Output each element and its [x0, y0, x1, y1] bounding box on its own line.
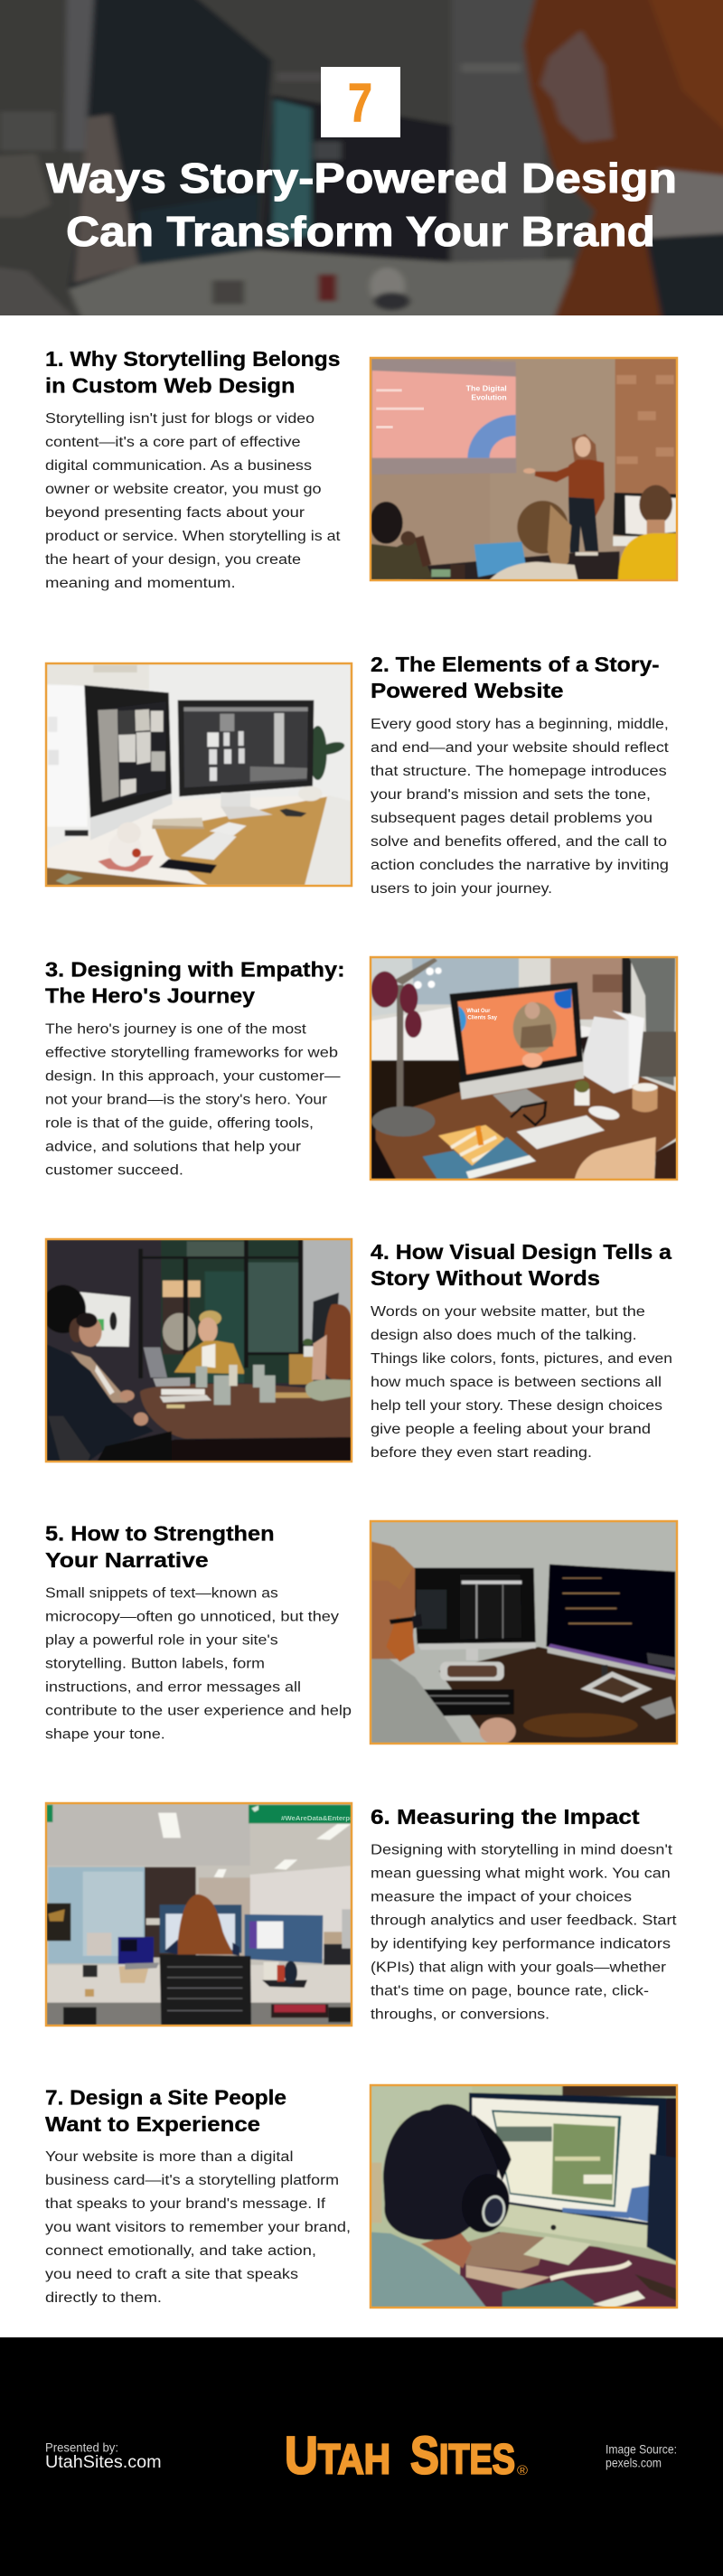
- heading 1: [45, 347, 340, 398]
- photo: developer at two monitors: [370, 1520, 678, 1744]
- heading 4: Story Without Words: [371, 1266, 600, 1290]
- section 3: [45, 956, 678, 1180]
- body text 4: Words on your website matter, but the: [371, 1304, 645, 1320]
- body text 6: mean guessing what might work. You can: [371, 1866, 671, 1882]
- body text 1: Storytelling isn't just for blogs or video: [45, 411, 315, 427]
- body text 2: users to join your journey.: [371, 881, 552, 897]
- section 4: [41, 1238, 672, 1462]
- photo: open office with woman at monitors: [45, 1802, 352, 2026]
- body text 7: [45, 2149, 351, 2306]
- body text 1: beyond presenting facts about your: [45, 505, 305, 521]
- heading 2: Powered Website: [371, 679, 564, 702]
- body text 5: contribute to the user experience and help: [45, 1703, 352, 1719]
- presented by: UtahSites.com: [45, 2453, 162, 2472]
- body text 6: measure the impact of your choices: [371, 1889, 632, 1905]
- body text 5: storytelling. Button labels, form: [45, 1656, 265, 1672]
- image source: Image Source:: [606, 2442, 677, 2457]
- body text 3: not your brand—is the story's hero. Your: [45, 1092, 327, 1108]
- body text 4: before they even start reading.: [371, 1445, 592, 1461]
- heading 2: [371, 653, 660, 702]
- header banner: [0, 0, 723, 332]
- slide text: [466, 384, 507, 401]
- title: Can Transform Your Brand: [66, 208, 655, 255]
- section 5: [45, 1520, 678, 1744]
- photo: presenter at projector screen: [370, 357, 678, 581]
- body text 2: your brand's mission and sets the tone,: [371, 787, 651, 803]
- screen text: What Our: [466, 1008, 491, 1014]
- heading 4: [371, 1240, 672, 1290]
- heading 1: 1. Why Storytelling Belongs: [45, 347, 340, 371]
- logo: Utah Sites: SITES: [410, 2426, 515, 2486]
- heading 2: 2. The Elements of a Story-: [371, 653, 660, 676]
- heading 6: 6. Measuring the Impact: [371, 1805, 640, 1829]
- heading 3: 3. Designing with Empathy:: [45, 958, 345, 982]
- heading 5: Your Narrative: [45, 1548, 209, 1572]
- banner text: #WeAreData&Enterpr: [281, 1814, 352, 1822]
- heading 5: 5. How to Strengthen: [45, 1522, 275, 1546]
- body text 1: content—it's a core part of effective: [45, 435, 301, 450]
- number badge: 7: [348, 72, 372, 133]
- title: [46, 155, 677, 255]
- screen text: Clients Say: [467, 1014, 497, 1020]
- body text 1: meaning and momentum.: [45, 576, 236, 591]
- body text 6: by identifying key performance indicators: [371, 1936, 671, 1952]
- body text 6: Designing with storytelling in mind doesn't: [371, 1842, 673, 1858]
- body text 7: connect emotionally, and take action,: [45, 2243, 316, 2259]
- body text 2: action concludes the narrative by inviting: [371, 858, 669, 873]
- body text 5: play a powerful role in your site's: [45, 1632, 278, 1649]
- body text 3: design. In this approach, your customer—: [45, 1068, 341, 1085]
- number badge: [321, 67, 400, 137]
- heading 5: [45, 1522, 275, 1572]
- section 7: [45, 2084, 678, 2308]
- photo: dual monitors on wooden desk: [45, 663, 352, 887]
- presented by: [45, 2440, 162, 2472]
- body text 3: [45, 1021, 341, 1179]
- body text 5: shape your tone.: [45, 1726, 165, 1743]
- body text 1: digital communication. As a business: [45, 458, 312, 474]
- screen text: [466, 1008, 497, 1020]
- heading 3: [45, 958, 345, 1007]
- image source: [606, 2442, 677, 2469]
- body text 2: and end—and your website should reflect: [371, 740, 670, 756]
- body text 7: business card—it's a storytelling platform: [45, 2173, 339, 2188]
- section 6: [45, 1802, 677, 2026]
- heading 3: The Hero's Journey: [45, 983, 255, 1007]
- body text 1: product or service. When storytelling is at: [45, 529, 341, 544]
- slide text: The Digital: [466, 384, 507, 392]
- body text 2: [371, 717, 670, 897]
- photo: team meeting around a table: [41, 1238, 352, 1462]
- section 1: [45, 347, 678, 591]
- body text 6: through analytics and user feedback. Start: [371, 1913, 677, 1929]
- body text 1: owner or website creator, you must go: [45, 482, 322, 497]
- body text 6: that's time on page, bounce rate, click-: [371, 1983, 649, 1999]
- heading 7: Want to Experience: [45, 2112, 260, 2136]
- footer: [0, 2337, 723, 2576]
- body text 5: instructions, and error messages all: [45, 1679, 301, 1696]
- title: Ways Story-Powered Design: [46, 155, 677, 202]
- presented by: Presented by:: [45, 2440, 118, 2455]
- body text 3: customer succeed.: [45, 1162, 183, 1179]
- heading 7: [45, 2086, 286, 2136]
- body text 6: [371, 1842, 677, 2023]
- body text 7: directly to them.: [45, 2290, 162, 2306]
- heading 7: 7. Design a Site People: [45, 2086, 286, 2110]
- body text 6: (KPIs) that align with your goals—whether: [371, 1960, 666, 1976]
- photo: person with headphones at iMac: [370, 2084, 678, 2308]
- body text 5: Small snippets of text—known as: [45, 1585, 278, 1602]
- logo: Utah Sites: [285, 2426, 528, 2486]
- photo: iMac on wooden desk: [370, 956, 678, 1180]
- body text 4: help tell your story. These design choices: [371, 1398, 662, 1414]
- body text 2: subsequent pages detail problems you: [371, 811, 653, 826]
- body text 7: you need to craft a site that speaks: [45, 2267, 298, 2282]
- logo: Utah Sites: UTAH: [285, 2426, 390, 2486]
- body text 4: Things like colors, fonts, pictures, and even: [371, 1351, 672, 1367]
- section 2: [45, 653, 670, 897]
- body text 2: Every good story has a beginning, middle,: [371, 717, 669, 732]
- body text 3: The hero's journey is one of the most: [45, 1021, 307, 1038]
- body text 5: [45, 1585, 352, 1743]
- body text 7: that speaks to your brand's message. If: [45, 2196, 326, 2212]
- body text 4: how much space is between sections all: [371, 1375, 662, 1390]
- body text 1: [45, 411, 341, 591]
- body text 4: give people a feeling about your brand: [371, 1422, 651, 1437]
- heading 1: in Custom Web Design: [45, 374, 295, 398]
- body text 3: advice, and solutions that help your: [45, 1139, 301, 1155]
- body text 4: design also does much of the talking.: [371, 1328, 637, 1343]
- body text 7: you want visitors to remember your brand,: [45, 2220, 351, 2235]
- image source: pexels.com: [606, 2455, 662, 2469]
- body text 5: microcopy—often go unnoticed, but they: [45, 1609, 339, 1625]
- slide text: Evolution: [471, 393, 507, 401]
- heading 4: 4. How Visual Design Tells a: [371, 1240, 672, 1264]
- header background photo: [0, 0, 723, 315]
- body text 7: Your website is more than a digital: [45, 2149, 293, 2165]
- body text 2: that structure. The homepage introduces: [371, 764, 667, 779]
- body text 6: throughs, or conversions.: [371, 2007, 549, 2023]
- body text 1: the heart of your design, you create: [45, 552, 301, 568]
- body text 3: role is that of the guide, offering tools,: [45, 1115, 314, 1132]
- body text 4: [371, 1304, 672, 1461]
- logo: Utah Sites: ®: [517, 2463, 528, 2478]
- body text 2: solve and benefits offered, and the call to: [371, 834, 667, 850]
- body text 3: effective storytelling frameworks for web: [45, 1045, 338, 1061]
